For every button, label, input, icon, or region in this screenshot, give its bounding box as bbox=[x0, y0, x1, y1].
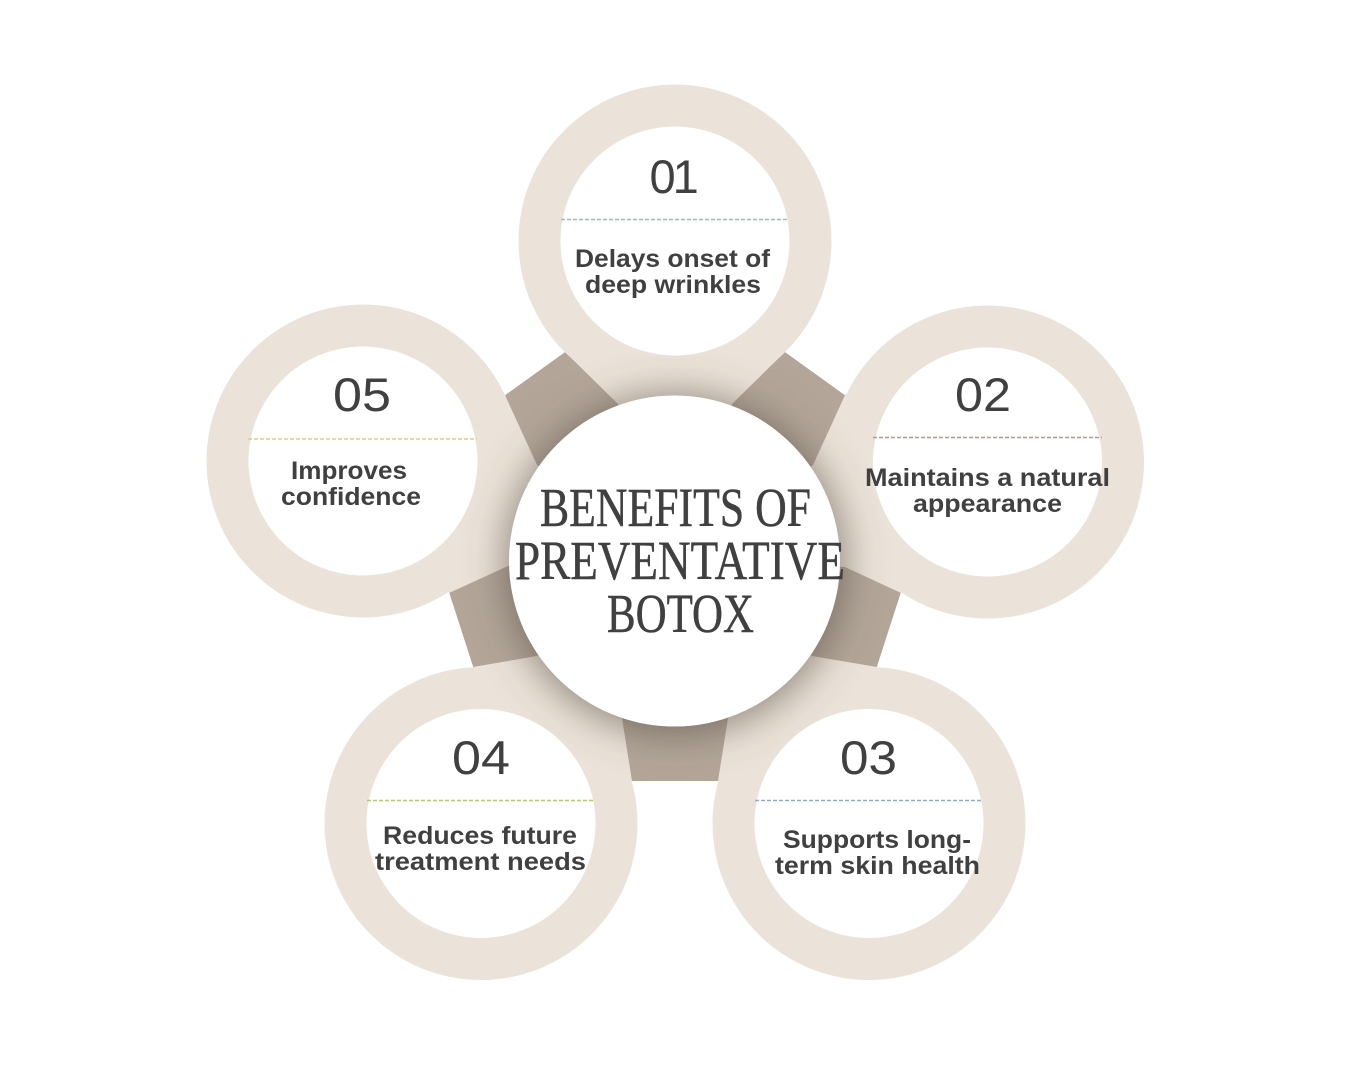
title: PREVENTATIVE bbox=[515, 530, 845, 591]
ring 03 shape bbox=[675, 560, 1026, 980]
label 04: Reduces future bbox=[383, 822, 577, 850]
number 05: 05 bbox=[333, 368, 391, 421]
center circle bbox=[509, 396, 840, 726]
number 03: 03 bbox=[840, 731, 897, 784]
pentagon backdrop bbox=[408, 273, 942, 781]
ring 01 shape bbox=[518, 84, 832, 560]
label 05: confidence bbox=[281, 483, 421, 511]
label 02: appearance bbox=[913, 490, 1062, 518]
center circle shadow bbox=[505, 394, 845, 734]
label 02: Maintains a natural bbox=[865, 464, 1110, 492]
ring 02 shape bbox=[675, 306, 1144, 618]
label 05: Improves bbox=[291, 457, 407, 485]
panel 02 bbox=[865, 348, 1110, 576]
number 01: 01 bbox=[650, 150, 697, 203]
ring shapes with connectors bbox=[206, 84, 1144, 980]
panel 03 bbox=[754, 709, 984, 938]
label 03: Supports long- bbox=[783, 826, 971, 854]
number 04: 04 bbox=[452, 731, 510, 784]
label 04: treatment needs bbox=[375, 848, 586, 876]
ring 05 shape bbox=[206, 304, 675, 618]
label 01: deep wrinkles bbox=[585, 271, 761, 299]
panel 05 bbox=[248, 346, 478, 576]
number 02: 02 bbox=[955, 368, 1011, 421]
panel 04 bbox=[366, 709, 596, 938]
title: BENEFITS OF bbox=[540, 477, 811, 538]
label 01: Delays onset of bbox=[575, 245, 771, 273]
label 03: term skin health bbox=[775, 852, 980, 880]
title: BOTOX bbox=[607, 583, 754, 644]
ring 04 shape bbox=[324, 560, 675, 980]
panel 01 bbox=[560, 126, 790, 356]
